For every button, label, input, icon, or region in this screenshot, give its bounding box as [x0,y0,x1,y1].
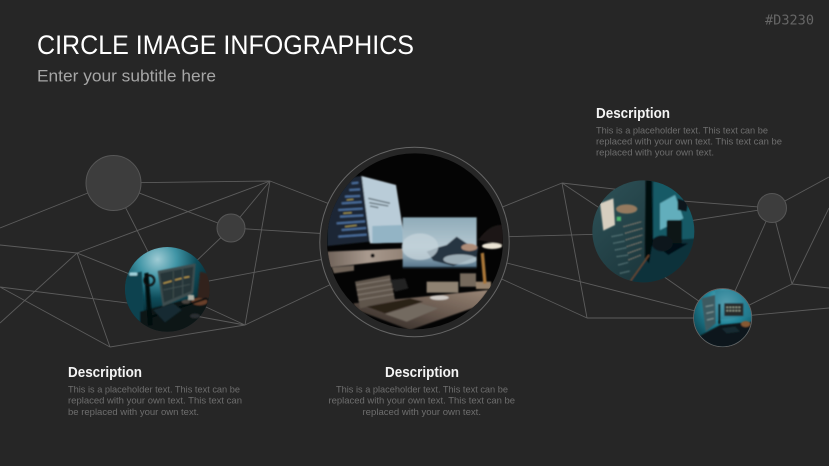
text block: left description: This is a placeholder text. This text can be [68,384,240,394]
slide code: #D3230 [765,14,814,28]
text block: center description: Description [385,365,459,381]
left image circle [125,247,210,332]
text block: top right description: Description [596,106,670,122]
desk with objects [353,273,491,330]
text block: top right description: replaced with your own text. [596,146,714,158]
text block: left description: be replaced with your own text. [68,406,199,417]
small gray circle node right [758,194,786,222]
large gray circle node [86,156,141,210]
text block: top right description: This is a placeholder text. This text can be [596,124,768,136]
small gray circle node left [217,214,245,242]
right monitor [402,217,478,269]
text block: top right description [596,106,782,158]
text block: center description: This is a placeholder text. This text can be [336,384,508,394]
subtitle: Enter your subtitle here [37,66,216,86]
text block: left description: replaced with your own text. This text can [68,394,242,406]
text block: left description: Description [68,365,142,381]
desk lamp [478,225,503,284]
left monitor [327,176,409,273]
right small image circle [693,288,753,348]
text block: center description [328,365,515,417]
title: CIRCLE IMAGE INFOGRAPHICS [37,30,414,60]
central image circle with ring [320,147,509,337]
network lines [0,177,829,347]
text block: left description [68,365,242,417]
text block: top right description: replaced with your own text. This text can be [596,136,782,146]
right large image circle [590,178,697,285]
text block: center description: replaced with your own text. [362,406,481,417]
text block: center description: replaced with your own text. This text can be [328,394,515,406]
